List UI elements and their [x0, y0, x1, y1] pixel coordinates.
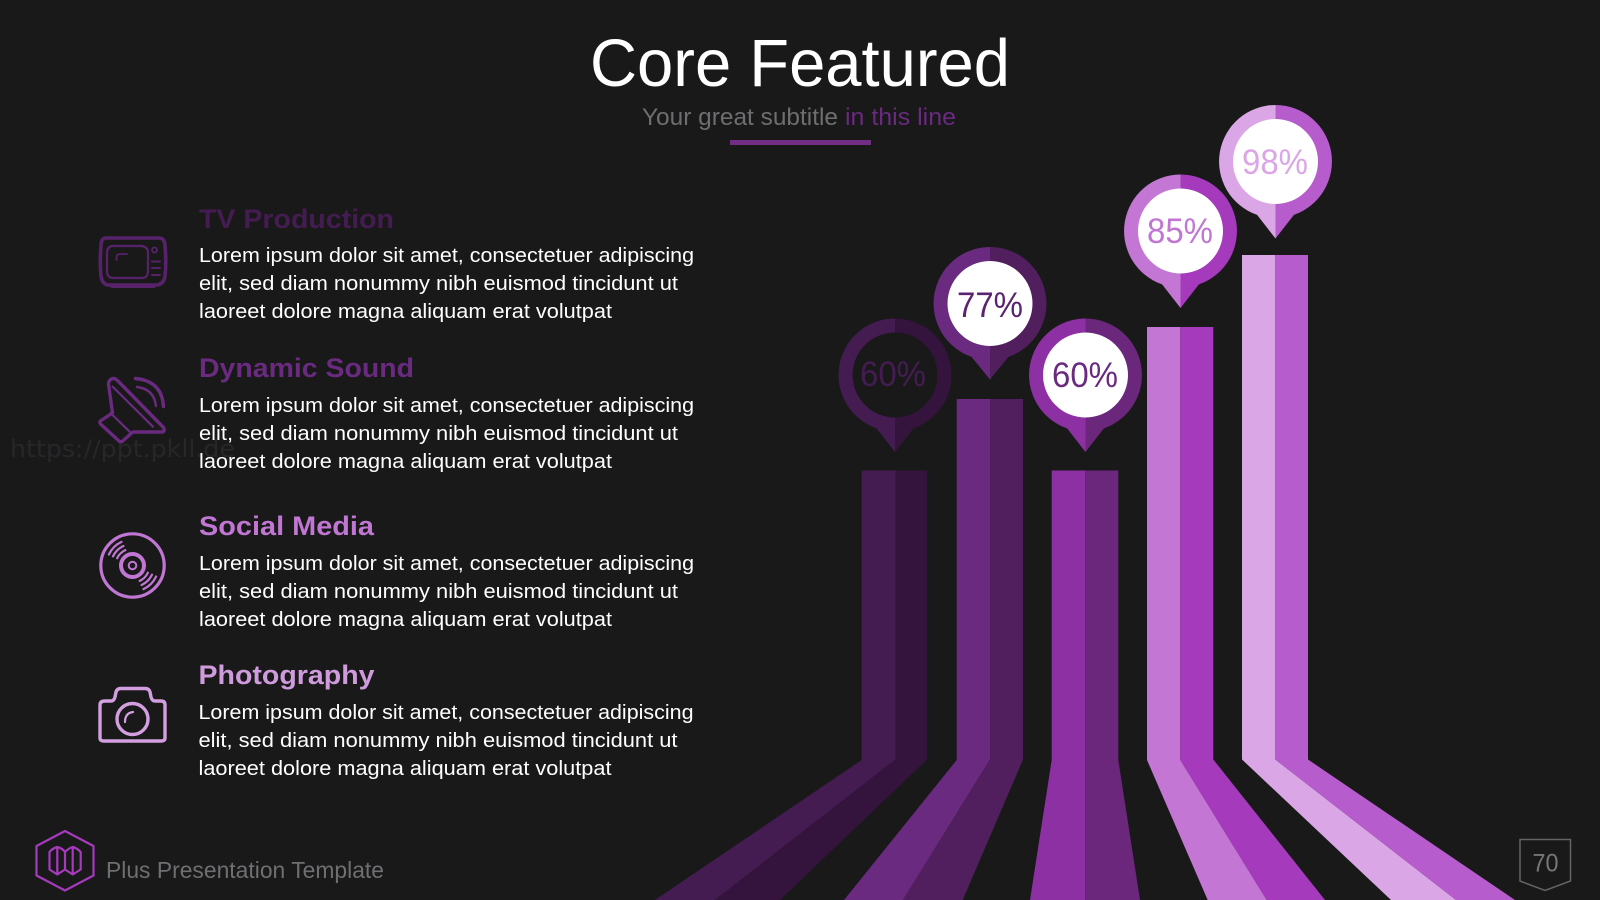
body text: laoreet dolore magna aliquam erat volutpat [199, 301, 612, 323]
body text [198, 702, 694, 780]
bar 2: 77% [844, 399, 1023, 900]
subtitle [642, 104, 956, 131]
pin: 85% [1124, 174, 1237, 308]
feature: TV Production [100, 204, 694, 323]
footer logo: hexagon with map [36, 831, 94, 890]
body text [199, 553, 694, 631]
body text: elit, sed diam nonummy nibh euismod tincidunt ut [198, 730, 678, 752]
pin: 98% [1219, 105, 1332, 238]
feature: Photography [100, 660, 694, 780]
body text [199, 245, 694, 323]
pin: 77%: 77% [957, 286, 1023, 325]
body text: elit, sed diam nonummy nibh euismod tincidunt ut [199, 581, 678, 603]
body text: elit, sed diam nonummy nibh euismod tincidunt ut [199, 423, 678, 445]
title underline [730, 140, 871, 145]
body text: laoreet dolore magna aliquam erat volutpat [199, 451, 612, 473]
body text: Lorem ipsum dolor sit amet, consectetuer adipiscing [199, 245, 694, 267]
feature: Social Media [101, 511, 694, 631]
body text: Lorem ipsum dolor sit amet, consectetuer adipiscing [198, 702, 694, 724]
footer text: Plus Presentation Template [106, 857, 384, 883]
bar 3: 60% [1030, 470, 1140, 900]
icon: camera [100, 688, 165, 741]
pin: 60% dark [839, 318, 951, 452]
bar 1: 60% [655, 470, 927, 900]
body text: elit, sed diam nonummy nibh euismod tincidunt ut [199, 273, 678, 295]
bar 4: 85% [1147, 327, 1325, 900]
body text: laoreet dolore magna aliquam erat volutpat [199, 609, 612, 631]
watermark: https://ppt.pkll.de [10, 435, 235, 463]
heading: Photography [198, 660, 374, 690]
pin: 60% [1029, 318, 1142, 452]
icon: disc [101, 534, 164, 597]
body text: Lorem ipsum dolor sit amet, consectetuer adipiscing [199, 553, 694, 575]
bar 5: 98% [1242, 255, 1515, 900]
pin: 60%: 60% [1052, 356, 1118, 395]
heading: Dynamic Sound [199, 353, 414, 383]
pin: 98%: 98% [1242, 143, 1308, 182]
body text: laoreet dolore magna aliquam erat volutpat [198, 758, 612, 780]
body text: Lorem ipsum dolor sit amet, consectetuer adipiscing [199, 395, 694, 417]
icon: television [100, 238, 166, 286]
icon: speaker [100, 378, 164, 442]
subtitle: Your great subtitle [642, 104, 838, 131]
pin: 85%: 85% [1147, 212, 1213, 251]
pin: 60% dark: 60% [860, 355, 926, 394]
title: Core Featured [590, 26, 1010, 101]
feature: Dynamic Sound [100, 353, 694, 473]
page number badge: 70 [1532, 850, 1558, 878]
subtitle: in this line [845, 104, 956, 131]
heading: TV Production [199, 204, 394, 234]
body text [199, 395, 694, 473]
heading: Social Media [199, 511, 375, 541]
pin: 77% [934, 247, 1046, 380]
page number badge [1520, 840, 1570, 890]
